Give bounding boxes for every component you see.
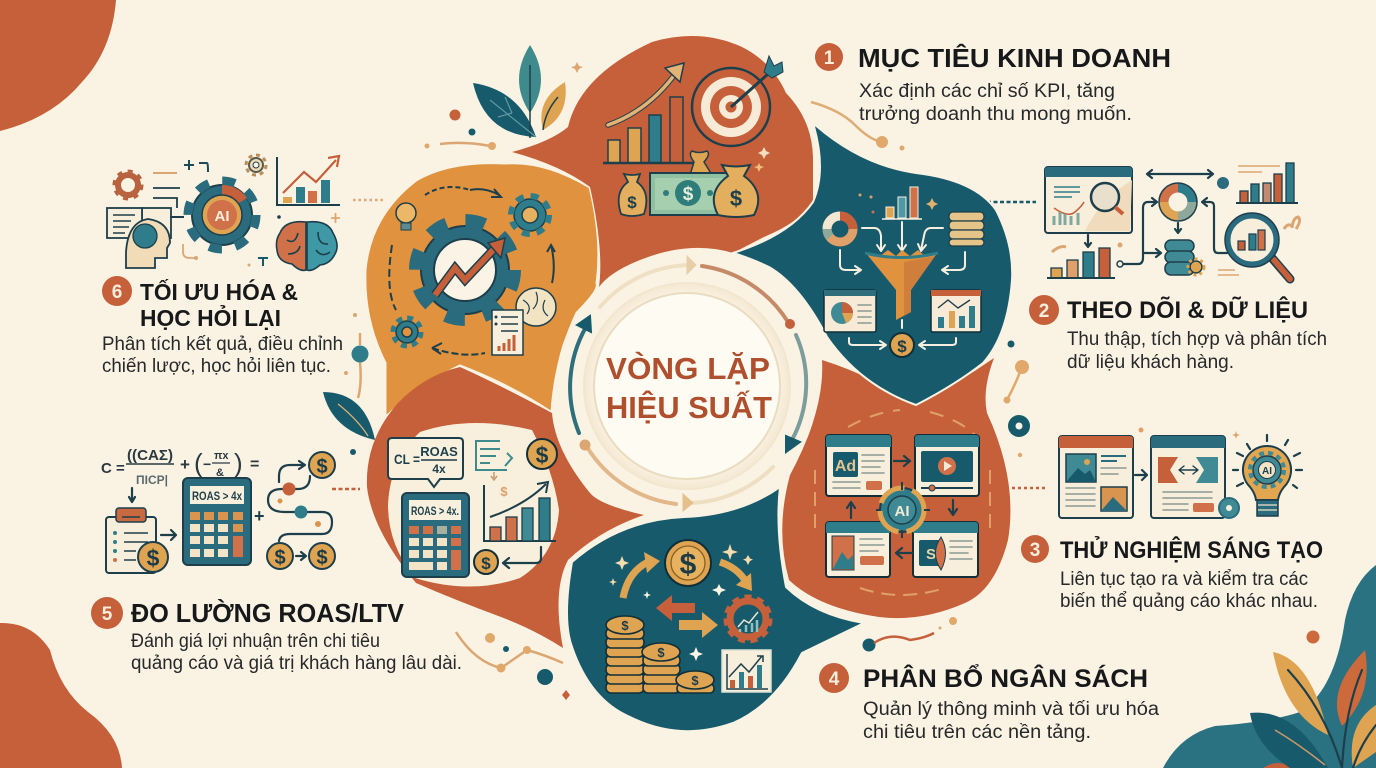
illustration: step 5 metrics: $ [481,554,491,573]
panel: step 2 teal blob [733,123,1012,405]
side icon: step 5 ROAS calc: + [254,506,265,526]
rust gear [118,175,138,195]
badge: step 6 [102,276,132,306]
center title [606,350,772,425]
formula bubble: CL = [394,452,420,467]
text: step 2 description [1067,329,1327,373]
coin [890,333,914,357]
browser window [1045,167,1132,233]
calculator [183,478,251,565]
small gear [249,158,263,172]
text: step 2 description: dữ liệu khách hàng. [1067,352,1234,373]
panel: step 4 teal blob [567,487,864,731]
text: step 5 description: Đánh giá lợi nhuận trên chi tiêu [131,631,380,652]
dashboard: chart window [931,290,981,332]
document [492,310,523,355]
flow arrows [847,456,957,558]
illustration: step 4 budget: $ [657,645,665,660]
calculator [402,493,469,577]
badge: step 4 [819,663,849,693]
text: step 2 description: Thu thập, tích hợp và phân tích [1067,329,1327,350]
light bulb [396,203,416,223]
badge: step 1 [815,43,843,71]
coin [527,439,557,469]
side icon: step 5 ROAS calc: $ [316,456,328,478]
heading: step 1: MỤC TIÊU KINH DOANH [858,43,1171,73]
window A [1059,436,1133,518]
badge: step 3 [1021,535,1049,563]
text: step 3 description: Liên tục tạo ra và kiểm tra các [1060,569,1308,590]
badge: step 6: 6 [112,282,122,303]
center loop [556,255,818,517]
sparkles [609,544,753,661]
formula: & [216,467,224,479]
badge: step 2 [1029,295,1059,325]
top bars [1238,166,1280,172]
corner blob: bottom left [0,623,122,768]
database [1165,240,1194,275]
formula: ((CAΣ) [127,447,173,464]
magnifier [1272,258,1290,279]
loop arcs [425,187,470,195]
documents [107,208,171,238]
formula: C = [101,460,125,477]
note icon [476,441,512,470]
database [949,212,984,246]
text: step 1 description: Xác định các chỉ số KPI, tăng [859,81,1115,102]
text: step 5 description: quảng cáo và giá trị khách hàng lâu dài. [131,653,462,674]
money [690,151,712,175]
coin stacks [606,616,714,693]
chart [277,157,340,205]
corner blob: top left [0,0,116,131]
heading: step 6 [140,278,298,331]
center title: VÒNG LẶP [606,350,770,386]
side icon: step 5 ROAS calc: $ [316,547,328,569]
center title: HIỆU SUẤT [606,389,772,425]
formula: ПICP| [136,473,168,487]
calculator: ROAS > 4x [192,489,242,503]
gear [730,601,766,637]
formula: + [180,455,190,474]
big coin [665,540,711,586]
coin with return arrow [474,550,498,574]
illustration: step 1 goals: $ [683,184,694,205]
illustration: step 2 funnel: $ [897,337,907,356]
panel: step 5 cream inset [388,423,559,586]
clipboard: $ [147,545,160,571]
formula: ) [234,448,243,478]
text: step 4 description: chi tiêu trên các nền tảng. [863,722,1091,743]
panel: step 6 orange blob [365,163,599,418]
illustration: step 2 funnel [824,187,984,357]
heading: step 6: TỐI ƯU HÓA & [140,278,298,305]
illustration: step 1 goals: $ [730,186,742,211]
bar chart [603,97,697,163]
connector dots around wheel [332,102,1048,700]
text: step 1 description [859,81,1132,125]
window: ad: Ad [835,458,856,475]
window: ad [826,435,891,496]
light bulb: AI [1262,466,1272,477]
heading: step 2: THEO DÕI & DỮ LIỆU [1067,296,1308,324]
illustration: step 1 goals [603,56,783,217]
curved arrows [623,562,648,598]
dart [731,74,768,107]
loop arrows [570,256,806,511]
arrows [840,222,965,349]
heading: step 5: ĐO LƯỜNG ROAS/LTV [131,598,405,628]
AI hub: AI [894,503,910,520]
light bulb [1233,435,1302,516]
target [692,68,770,146]
formula: − [203,456,211,472]
formula: ( [194,448,203,478]
text: step 5 description [131,631,462,674]
side icon: step 6 AI optimisation [107,155,340,270]
big gear with AI [192,185,252,245]
window: video [915,435,979,496]
small bars [886,187,918,218]
panel: step 3 rust blob [782,358,1010,618]
illustration: step 3 ad variants [815,410,990,595]
illustration: step 5 metrics: $ [536,442,549,468]
exchange arrows [656,595,695,621]
panel: step 1 rust blob [512,36,813,287]
text: step 4 description [863,699,1159,743]
heading: step 3: THỬ NGHIỆM SÁNG TẠO [1060,535,1323,564]
panel: step 5 rust blob [367,367,644,648]
rising arrow [608,70,678,125]
bars [1051,248,1110,278]
text: step 3 description [1060,569,1318,612]
side icon: step 5 ROAS calc [101,447,335,573]
badge: step 3: 3 [1030,540,1040,561]
large gear [421,226,509,314]
formula: πx [214,450,229,462]
text: step 3 description: biến thể quảng cáo khác nhau. [1060,591,1318,612]
formula bubble [388,438,463,487]
badge: step 5 [91,597,123,629]
side icon: step 6 AI optimisation: AI [214,208,230,225]
illustration: step 4 budget [606,540,771,693]
window: image [826,522,890,577]
AI hub [876,482,930,538]
chart card [722,650,771,692]
funnel [865,250,938,320]
growth chart [484,485,556,541]
flow path [268,461,332,541]
illustration: step 4 budget: $ [691,673,699,688]
brain [516,288,556,326]
calculator: ROAS > 4x. [411,506,459,518]
heading: step 4: PHÂN BỔ NGÂN SÁCH [863,663,1148,693]
decoration: top leaves [424,45,583,150]
illustration: step 6 optimisation [389,187,556,355]
window: variant [913,522,978,577]
text: step 4 description: Quản lý thông minh và tối ưu hóa [863,699,1159,720]
text: step 6 description [102,334,343,377]
side icon: step 3 creative test [1059,428,1302,518]
illustration: step 5 metrics [388,438,557,577]
center disc [584,283,790,489]
side icon: step 2 analytics [1045,163,1300,279]
formula bubble: ROAS [420,444,458,459]
small gears [514,199,546,231]
brain [276,222,337,270]
head [126,219,170,268]
dot: bottom right [1306,630,1320,644]
badge: step 1: 1 [824,48,835,69]
badge: step 2: 2 [1039,301,1049,322]
clipboard [106,508,168,573]
donut [1164,188,1192,216]
window B [1151,436,1225,518]
badge: step 4: 4 [829,669,840,690]
corner decoration: bottom right foliage [1163,565,1376,768]
dashboard: pie window [824,290,876,332]
donut [827,216,853,242]
badge: step 5: 5 [102,604,113,625]
illustration: step 4 budget: $ [621,618,629,633]
side icon: step 5 ROAS calc: $ [274,547,286,569]
illustration: step 4 budget: $ [680,548,697,581]
decoration: left leaf [323,392,375,440]
heading: step 6: HỌC HỎI LẠI [140,303,281,331]
formula [101,447,259,487]
illustration: step 1 goals: $ [627,193,637,212]
window: variant: S [926,546,936,563]
text: step 1 description: trưởng doanh thu mong muốn. [859,104,1132,125]
formula: = [250,456,259,473]
text: step 6 description: Phân tích kết quả, điều chỉnh [102,334,343,355]
text: step 6 description: chiến lược, học hỏi liên tục. [102,356,331,377]
illustration: step 5 metrics: $ [500,484,508,499]
formula bubble: 4x [432,462,446,476]
